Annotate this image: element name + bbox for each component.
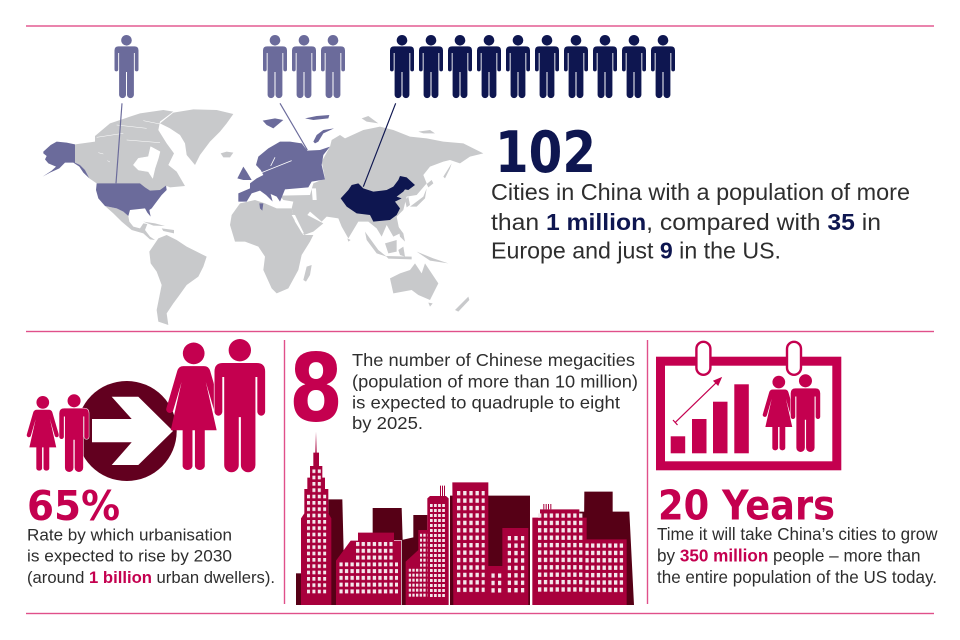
text block: growth: Time it will take China’s cities to grow <box>657 524 938 544</box>
icon: man <box>791 374 820 452</box>
heading: 8: 8 <box>289 334 343 444</box>
panel: world map <box>43 103 483 325</box>
heading: 102: 102 <box>495 120 596 186</box>
icon: large man <box>214 339 265 472</box>
icon: circle with arrow <box>77 381 177 481</box>
arrow: rising trend <box>673 378 721 425</box>
map: the Americas <box>43 103 233 325</box>
map: Europe leader line <box>280 103 307 150</box>
icon: woman <box>763 376 795 450</box>
text block: growth: by 350 million people – more than <box>657 546 920 566</box>
icon: large woman <box>166 342 221 470</box>
map: inland seas <box>292 188 317 233</box>
map: Europe highlighted <box>237 115 334 211</box>
calendar ring left <box>696 342 710 375</box>
illustration: city skyline <box>296 432 634 605</box>
icon: calendar with chart and couple <box>660 342 837 466</box>
skyline: dark back buildings <box>296 492 634 605</box>
text block: cities <box>491 179 910 264</box>
map: China leader line <box>363 103 396 187</box>
text block: megacities: is expected to quadruple to eight <box>352 392 620 412</box>
map: China highlighted <box>341 176 415 222</box>
text block: urbanisation <box>27 526 275 587</box>
map: United States highlighted <box>43 142 167 217</box>
icons: ten people for China <box>390 35 675 98</box>
text block: cities: Europe and just 9 in the US. <box>491 238 781 264</box>
calendar ring right <box>787 342 801 375</box>
text block: megacities <box>352 350 638 433</box>
text block: urbanisation: (around 1 billion urban dwellers). <box>27 568 275 587</box>
map: Hudson Bay and Arctic channels <box>97 121 160 178</box>
text block: megacities: by 2025. <box>352 413 423 433</box>
map: Eurasia, Africa and Oceania <box>230 103 483 312</box>
map: Canada, Greenland, Latin America <box>75 109 233 325</box>
icon: small boy <box>59 394 89 472</box>
skyline: lit windows <box>307 469 623 597</box>
text block: growth <box>657 524 938 587</box>
map: Baltic channels <box>250 157 292 197</box>
text block: cities: than 1 million, compared with 35 in <box>491 209 881 235</box>
text block: megacities: (population of more than 10 million) <box>352 371 638 391</box>
skyline: front buildings <box>301 432 627 605</box>
text block: urbanisation: Rate by which urbanisation <box>27 526 232 544</box>
heading: 65%: 65% <box>27 482 120 530</box>
icon: one person for USA <box>114 35 138 98</box>
icon: small girl <box>27 396 59 471</box>
heading: 20 Years: 20 Years <box>658 482 835 530</box>
calendar frame <box>660 361 837 466</box>
text block: growth: the entire population of the US today. <box>657 567 937 587</box>
bar chart <box>671 384 749 453</box>
panel: urbanisation rate <box>27 339 275 587</box>
text block: megacities: The number of Chinese megacities <box>352 350 635 370</box>
panel: megacities <box>289 334 638 605</box>
icons: three people for Europe <box>263 35 345 98</box>
text block: urbanisation: is expected to rise by 2030 <box>27 546 232 566</box>
map: USA leader line <box>116 103 122 183</box>
panel: twenty years <box>657 342 938 587</box>
map: grey land masses <box>230 116 483 312</box>
text block: cities: Cities in China with a population of more <box>491 179 910 205</box>
